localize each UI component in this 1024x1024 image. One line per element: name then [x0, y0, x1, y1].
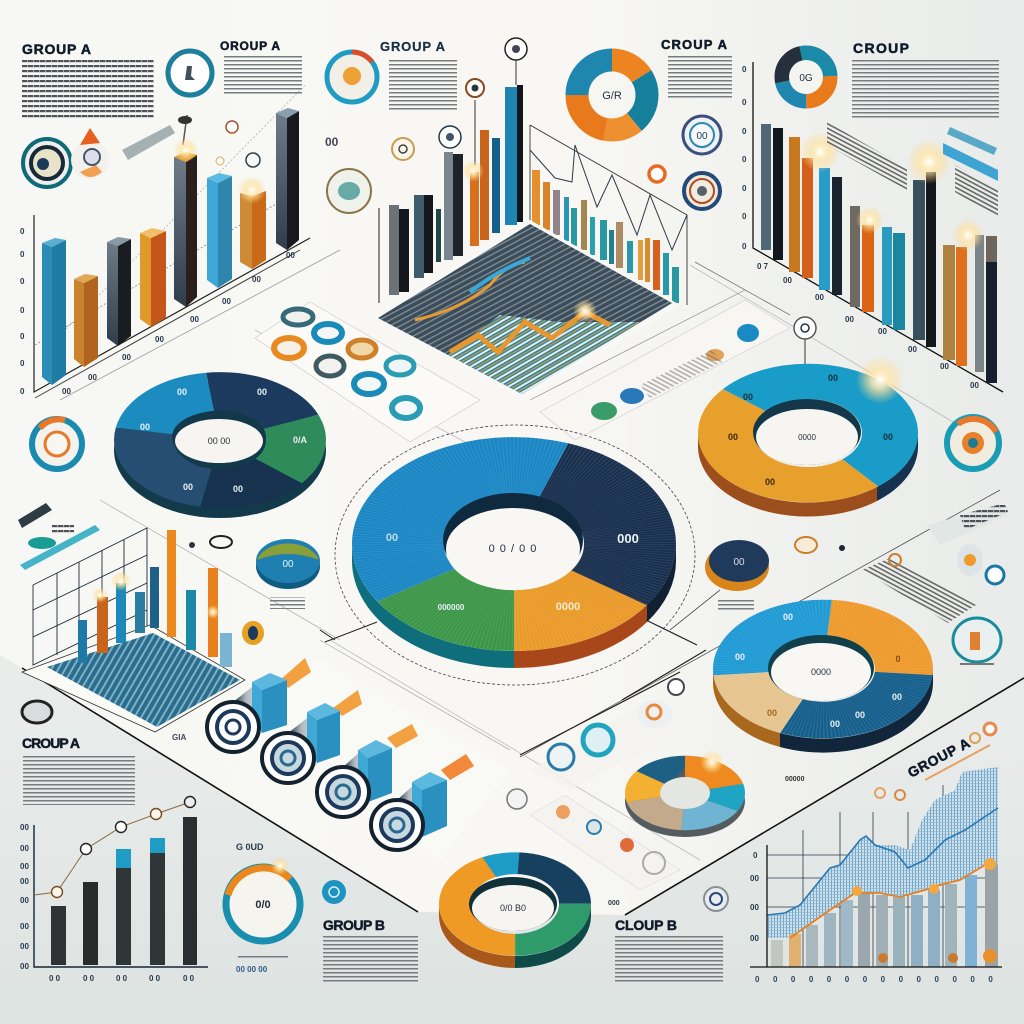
orange markers [852, 858, 997, 963]
label: ring bottom caption: 00 00 00 [236, 965, 268, 974]
chart: bottom right area and bars [750, 767, 1006, 984]
donut labels [728, 373, 893, 487]
icon: small orange badge [795, 537, 845, 553]
text patches: top right chart [827, 122, 998, 218]
highlight glows: top left chart [174, 138, 266, 204]
axis: top right chart [753, 62, 1003, 392]
bar chart: middle top [379, 85, 523, 303]
donut: top flat: G/R [602, 90, 622, 102]
text block: fourth [668, 54, 732, 98]
bar 1 [42, 238, 66, 385]
axis labels: top right chart: 0 [742, 212, 747, 221]
x-axis labels: 0 0 [49, 974, 61, 983]
y-axis labels: 00 [20, 896, 29, 905]
dark bars [389, 152, 463, 295]
right pairs [943, 235, 997, 383]
donut labels: 00 [743, 392, 753, 402]
panel: top left notes [18, 503, 100, 570]
orange and blue bars [470, 85, 523, 246]
axis labels: top left chart: 0 [20, 306, 25, 315]
axis labels: top right chart: 0 [742, 65, 747, 74]
label: small blue coin caption [270, 597, 305, 609]
axis labels: top right chart: 0 [742, 184, 747, 193]
donut labels: 00 [883, 432, 893, 442]
text block: second [224, 54, 302, 94]
label: rollers caption: GIA [172, 733, 186, 742]
donut labels: 00 [183, 482, 193, 492]
glow: middle chart [462, 160, 484, 182]
bars [78, 530, 232, 667]
x-axis labels: 00000000000000 [755, 975, 1006, 984]
icon: dark navy coin [705, 540, 769, 591]
donut labels: 00 [828, 373, 838, 383]
category labels: top right chart: 00 [908, 345, 917, 354]
y-axis labels: 00 [20, 922, 29, 931]
heading: group B right: CLOUP B [615, 917, 677, 933]
icon: pin marker over middle chart [466, 38, 527, 165]
axis labels: top left chart: 0 [20, 250, 25, 259]
icon: dark orange ring [684, 173, 720, 209]
icons: small badges near grid [189, 536, 264, 645]
thin bars [532, 170, 679, 303]
axis labels: top left chart: 0 [20, 387, 25, 396]
axis labels: top right chart: 0 [742, 98, 747, 107]
ring 5 [316, 356, 344, 376]
main donut segments [398, 467, 630, 621]
ring 7 [354, 374, 384, 394]
base plate [22, 625, 245, 732]
perspective grid [33, 528, 147, 665]
icon: ring donut top right: 0G [799, 73, 813, 84]
icon: pen and annotation [122, 115, 260, 167]
roller 2 [262, 690, 362, 783]
panel: skewed notes right [862, 503, 1008, 623]
donut depth [439, 904, 591, 968]
category labels: top left chart: 00 [155, 335, 164, 344]
category labels: top right chart: 00 [970, 381, 979, 390]
donut: bottom centre [439, 863, 591, 968]
category labels: top left chart: 00 [88, 373, 97, 382]
donut labels: 00 [233, 484, 243, 494]
x-axis labels: 0 0 [149, 974, 161, 983]
glows: top right chart [800, 132, 984, 251]
panel: lower strip icons [507, 789, 680, 907]
donut hole [768, 635, 874, 701]
pie segments [643, 767, 727, 819]
donut labels [735, 612, 902, 729]
orange line [790, 862, 990, 938]
donut: top flat [577, 60, 647, 130]
donut hole [172, 411, 266, 463]
ring 6 [386, 357, 414, 375]
label: ring bottom caption [236, 955, 288, 974]
category labels: top left chart: 00 [222, 297, 231, 306]
axis: top left chart [34, 215, 310, 392]
axis labels: top right chart: 0 [742, 127, 747, 136]
axis labels: top right chart: 0 [742, 242, 747, 251]
donut labels: 00 [728, 432, 738, 442]
axis labels: top left chart [20, 227, 25, 396]
axis labels: top right chart: 0 [742, 155, 747, 164]
ring 2 [314, 324, 342, 342]
grid [767, 785, 998, 967]
middle pairs [850, 172, 936, 347]
category labels: top right chart: 0 7 [757, 262, 769, 271]
donut: left [114, 382, 326, 518]
donut labels [140, 387, 307, 494]
main donut labels: 000000 [438, 603, 465, 612]
icon: ring left of donut [32, 419, 82, 469]
bar 8 [276, 108, 299, 250]
icon: blue double ring [683, 116, 721, 154]
bar chart: top right descending [753, 62, 1003, 392]
trend line [34, 796, 196, 898]
donut labels: 00 [892, 692, 902, 702]
label: ring top caption: G 0UD [236, 842, 264, 852]
main donut hole [443, 493, 583, 590]
bar 6 [207, 173, 232, 288]
donut segments [144, 391, 296, 489]
donut hole [753, 399, 861, 465]
glow: right upper donut [856, 356, 904, 404]
main donut labels: 000 [617, 531, 639, 546]
main donut labels: 00 [386, 532, 398, 544]
axis [750, 845, 1002, 967]
ring 4 [348, 340, 376, 358]
x-axis labels: 0 0 [183, 974, 195, 983]
icon: small blue coin: 00 [282, 559, 294, 570]
donut labels: 00 [765, 477, 775, 487]
category labels: top right chart [757, 262, 979, 390]
chart: thin bars with zigzag line [530, 125, 687, 305]
panel: diamond data map [378, 220, 676, 394]
main donut hole: 0 0 / 0 0 [489, 543, 537, 555]
panel: right strip with icons [540, 300, 816, 440]
text block: group B [323, 936, 418, 984]
donut hole: 00 00 [208, 436, 230, 446]
grid and zigzag [530, 125, 687, 305]
bar 4 [140, 228, 166, 327]
x-axis labels: 0 0 [83, 974, 95, 983]
y-axis labels: 00 [20, 877, 29, 886]
ring 8 [392, 398, 420, 418]
bar chart: bottom left with line [20, 796, 208, 983]
donut segments [726, 381, 890, 485]
y-axis labels: 00 [750, 874, 759, 883]
icon: dark teal badge left [23, 139, 71, 187]
icon: blue ring with orange centre [327, 52, 377, 102]
donut labels: 00 [177, 387, 187, 397]
y-axis labels [750, 851, 759, 943]
bars [771, 865, 998, 967]
icon: orange spark badge [71, 128, 109, 179]
axis labels: top left chart: 0 [20, 332, 25, 341]
category labels: top left chart: 00 [190, 315, 199, 324]
icons: middle chart annotations: 00 [325, 135, 339, 149]
y-axis labels: 00 [750, 934, 759, 943]
y-axis labels [20, 823, 29, 971]
donut labels: 00 [783, 612, 793, 622]
y-axis labels: 00 [20, 962, 29, 971]
donut labels: 0/A [293, 435, 307, 445]
text block: group B right [615, 936, 723, 984]
main donut labels: 0000 [556, 601, 580, 613]
chart: left grid with bars [22, 528, 245, 732]
axis labels: top left chart: 0 [20, 277, 25, 286]
text block: lower left [23, 755, 135, 805]
text block: third [389, 59, 457, 111]
connectors around main donut [320, 590, 720, 700]
donut: main centre [335, 425, 695, 685]
x-axis labels [49, 974, 195, 983]
axis: middle chart [378, 208, 380, 303]
donut segments [455, 863, 575, 945]
heading: group: CROUP [853, 40, 909, 56]
ring: bottom centre left [226, 857, 300, 941]
y-axis labels: 00 [20, 844, 29, 853]
donut hole: 0000 [811, 667, 831, 677]
category labels: top left chart: 00 [286, 251, 295, 260]
donut depth [698, 433, 918, 516]
icon: dark navy coin: 00 [733, 557, 745, 568]
category labels: top left chart: 00 [122, 353, 131, 362]
donut labels: 00 [735, 652, 745, 662]
bar 2 [74, 274, 98, 367]
donut hole [469, 877, 557, 931]
heading: group A second: OROUP A [220, 39, 280, 53]
x-axis labels: 0 0 [116, 974, 128, 983]
axis labels: top right chart [742, 65, 747, 251]
glow: small pie [700, 750, 724, 774]
donut depth [713, 669, 933, 753]
roller 3 [317, 724, 418, 817]
icon: ring right edge [947, 417, 999, 469]
heading: group A lower left: CROUP A [22, 735, 80, 751]
category labels: top right chart: 00 [878, 327, 887, 336]
bar chart: top left [34, 108, 310, 392]
panel: row of mini rings [255, 302, 480, 442]
donut labels: 00 [140, 422, 150, 432]
pie: small striped [625, 765, 745, 837]
pie centre [660, 777, 710, 809]
icon: orange small ring [649, 166, 665, 182]
icon: scribble badge [22, 701, 52, 723]
donut depth [114, 382, 326, 518]
donut labels: 00 [767, 708, 777, 718]
bar 7 [240, 191, 266, 269]
category labels: top right chart: 00 [783, 276, 792, 285]
panel: strip with ring icons [520, 672, 684, 790]
donut labels: 00 [257, 387, 267, 397]
ring 1 [283, 309, 313, 325]
icons: middle chart annotations [325, 126, 461, 213]
glows: left grid [92, 571, 220, 619]
donut: right lower [713, 612, 933, 753]
text block: top right [852, 60, 999, 120]
donut labels: 0 [895, 654, 901, 664]
ring: bottom centre left: 0/0 [255, 899, 271, 911]
blue tile [47, 633, 240, 727]
heading: group B: GROUP B [323, 917, 385, 933]
icon: blue double ring: 00 [696, 131, 708, 142]
category labels: top right chart: 00 [845, 315, 854, 324]
icons: orange markers near rotated heading [875, 723, 996, 800]
label: navy coin caption [718, 599, 754, 611]
pie depth [625, 765, 745, 837]
y-axis labels: 00 [20, 942, 29, 951]
category labels: top left chart [62, 251, 295, 396]
y-axis labels: 00 [750, 903, 759, 912]
blue caps [116, 838, 165, 868]
text block: top left [22, 60, 154, 118]
heading: group A fourth: CROUP A [661, 37, 728, 52]
icon: small blue circle [322, 880, 346, 904]
axis: bottom left chart [34, 825, 208, 967]
donut labels: 00 [855, 710, 865, 720]
icon: teal ring top [168, 51, 212, 95]
icon: ring near group B [704, 887, 728, 911]
dashed orbit [335, 425, 695, 685]
y-axis labels: 0 [753, 851, 758, 860]
main donut labels [386, 531, 639, 613]
category labels: top right chart: 00 [940, 362, 949, 371]
ring 3 [274, 338, 304, 358]
hatched area [767, 767, 998, 938]
y-axis labels: 00 [20, 862, 29, 871]
donut hole: 0/0 B0 [500, 903, 526, 913]
panel: rollers strip [207, 658, 510, 860]
bar 5 [174, 152, 197, 307]
icon: small blue coin [256, 539, 320, 589]
heading: rotated group label: GROUP A [905, 735, 972, 781]
main donut depth [352, 544, 676, 668]
roller 4 [371, 754, 474, 850]
blue line [767, 808, 998, 915]
axis labels: top left chart: 0 [20, 359, 25, 368]
donut segments [742, 618, 904, 720]
category labels: top left chart: 00 [252, 275, 261, 284]
y-axis labels: 00 [20, 823, 29, 832]
category labels: top left chart: 00 [62, 387, 71, 396]
left pairs [761, 124, 842, 295]
icon: teal gadget right [953, 618, 1001, 664]
label: small pie caption: 00000 [785, 776, 805, 783]
heading: group A third: GROUP A [380, 39, 446, 54]
icon: ring donut top right [782, 53, 830, 101]
donut labels: 00 [830, 719, 840, 729]
panel: lower strip icons: 000 [608, 900, 620, 907]
donut: right upper [698, 373, 918, 516]
category labels: top right chart: 00 [815, 293, 824, 302]
heading: group A top left: GROUP A [22, 41, 91, 57]
dark bars [51, 817, 197, 965]
axis labels: top left chart: 0 [20, 227, 25, 236]
donut hole: 0000 [798, 433, 816, 442]
bar 3 [107, 237, 131, 346]
roller 1 [207, 658, 311, 752]
